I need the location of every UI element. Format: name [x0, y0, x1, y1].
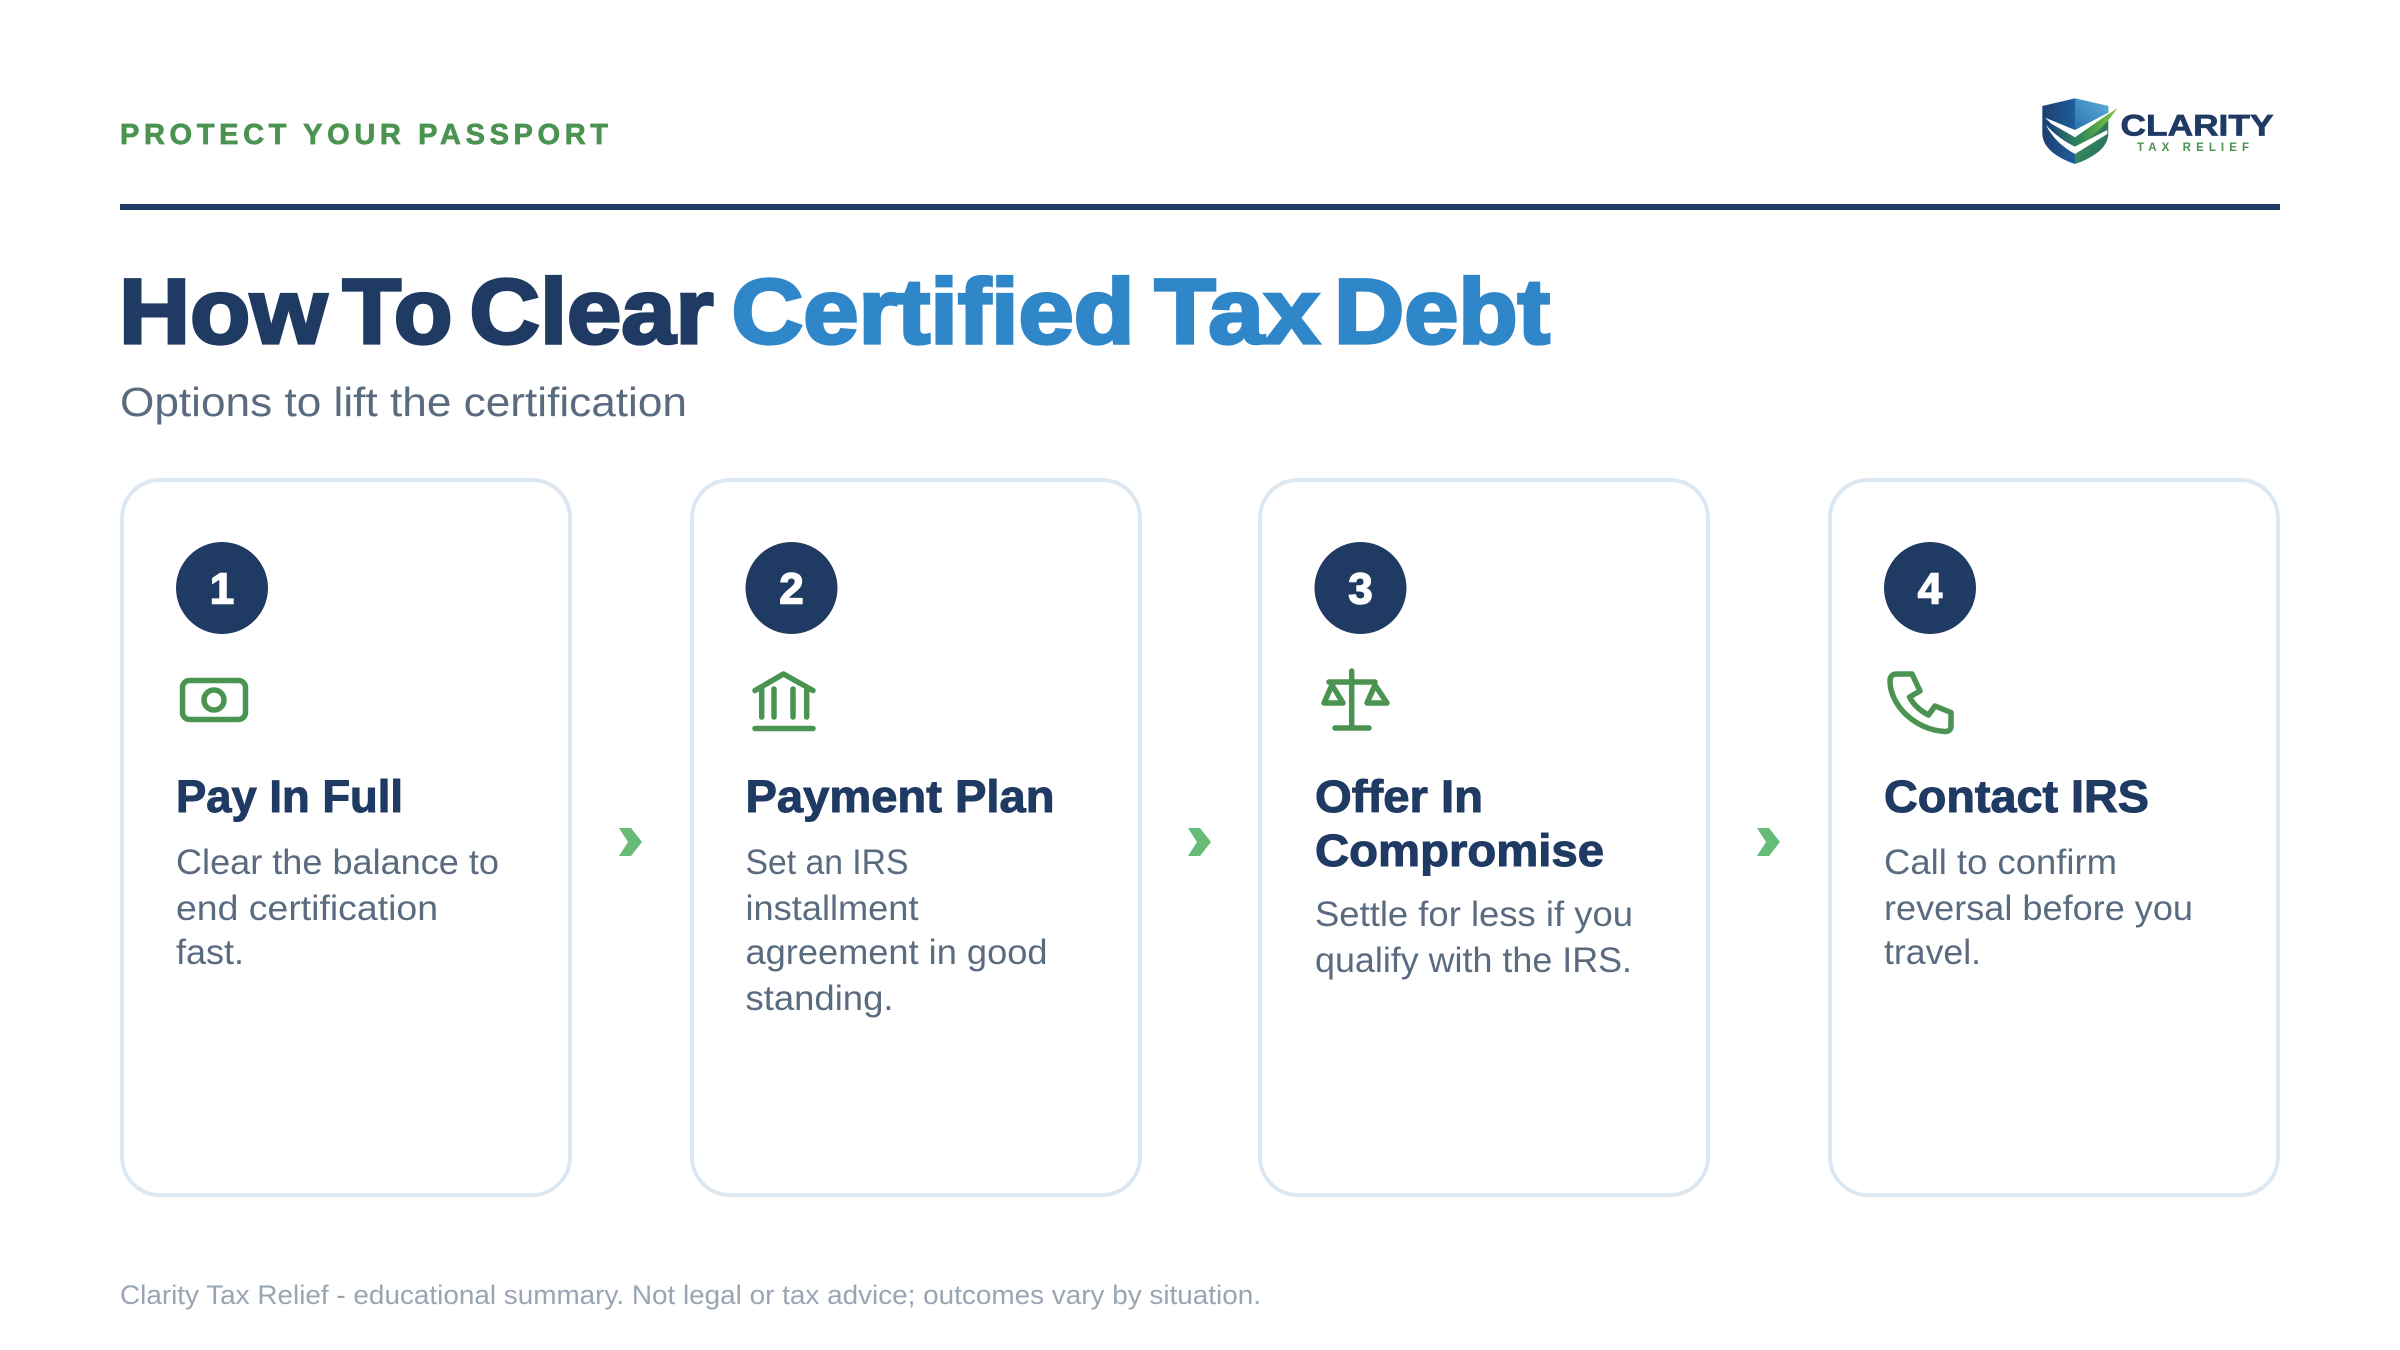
body text	[746, 843, 1048, 1018]
panel: step 2 payment plan	[692, 480, 1140, 1195]
body text: travel.	[1884, 933, 1981, 972]
title: How	[119, 261, 327, 363]
eyebrow: protect your passport: PROTECT YOUR PASSPORT	[120, 119, 608, 151]
header rule	[120, 204, 2280, 210]
icon: phone	[1890, 674, 1951, 732]
icon: banknote	[182, 680, 246, 720]
panel: step 4 contact irs	[1830, 480, 2278, 1195]
body text: fast.	[176, 933, 244, 972]
title: To	[342, 261, 452, 363]
body text	[1884, 843, 2193, 972]
step number 1	[176, 542, 268, 634]
body text: standing.	[746, 979, 894, 1018]
step number 1: 1	[210, 564, 234, 614]
body text: Call to confirm	[1884, 843, 2117, 882]
title accent	[732, 261, 1550, 363]
title accent: Certified	[732, 261, 1134, 363]
title accent: Debt	[1334, 261, 1550, 363]
body text	[176, 843, 499, 972]
logo: Clarity Tax Relief	[2042, 98, 2274, 164]
title accent: Tax	[1154, 261, 1320, 363]
step number 4	[1884, 542, 1976, 634]
panel: step 3 offer in compromise	[1260, 480, 1708, 1195]
step number 3	[1314, 542, 1406, 634]
icon: bank	[755, 674, 813, 728]
body text: Clear the balance to	[176, 843, 499, 882]
heading: Payment Plan	[746, 771, 1054, 822]
body text: end certification	[176, 889, 438, 928]
title	[119, 261, 714, 363]
logo wordmark: CLARITY	[2120, 110, 2274, 142]
heading: Pay In Full	[176, 771, 403, 822]
footer disclaimer: Clarity Tax Relief - educational summary. Not legal or tax advice; outcomes vary by situation.	[120, 1280, 1261, 1310]
step number 3: 3	[1348, 564, 1373, 614]
step number 4: 4	[1918, 564, 1943, 614]
step number 2	[746, 542, 838, 634]
arrow 3	[1757, 828, 1780, 856]
icon: scales	[1324, 671, 1387, 728]
body text: Settle for less if you	[1315, 895, 1633, 934]
body text: Set an IRS	[746, 843, 908, 882]
body text: installment	[746, 889, 919, 928]
subtitle: Options to lift the certification	[120, 379, 687, 425]
heading line 2: Compromise	[1315, 825, 1604, 876]
panel: step 1 pay in full	[122, 480, 570, 1195]
title: Clear	[470, 261, 714, 363]
logo shield	[2042, 98, 2117, 164]
heading: Offer In	[1315, 771, 1483, 822]
body text: reversal before you	[1884, 889, 2193, 928]
step number 2: 2	[779, 564, 804, 614]
body text: agreement in good	[746, 933, 1048, 972]
arrow 2	[1188, 828, 1211, 856]
body text: qualify with the IRS.	[1315, 941, 1632, 980]
logo tagline: TAX RELIEF	[2137, 142, 2249, 154]
heading: Contact IRS	[1884, 771, 2149, 822]
body text	[1315, 895, 1633, 980]
arrow 1	[619, 828, 642, 856]
